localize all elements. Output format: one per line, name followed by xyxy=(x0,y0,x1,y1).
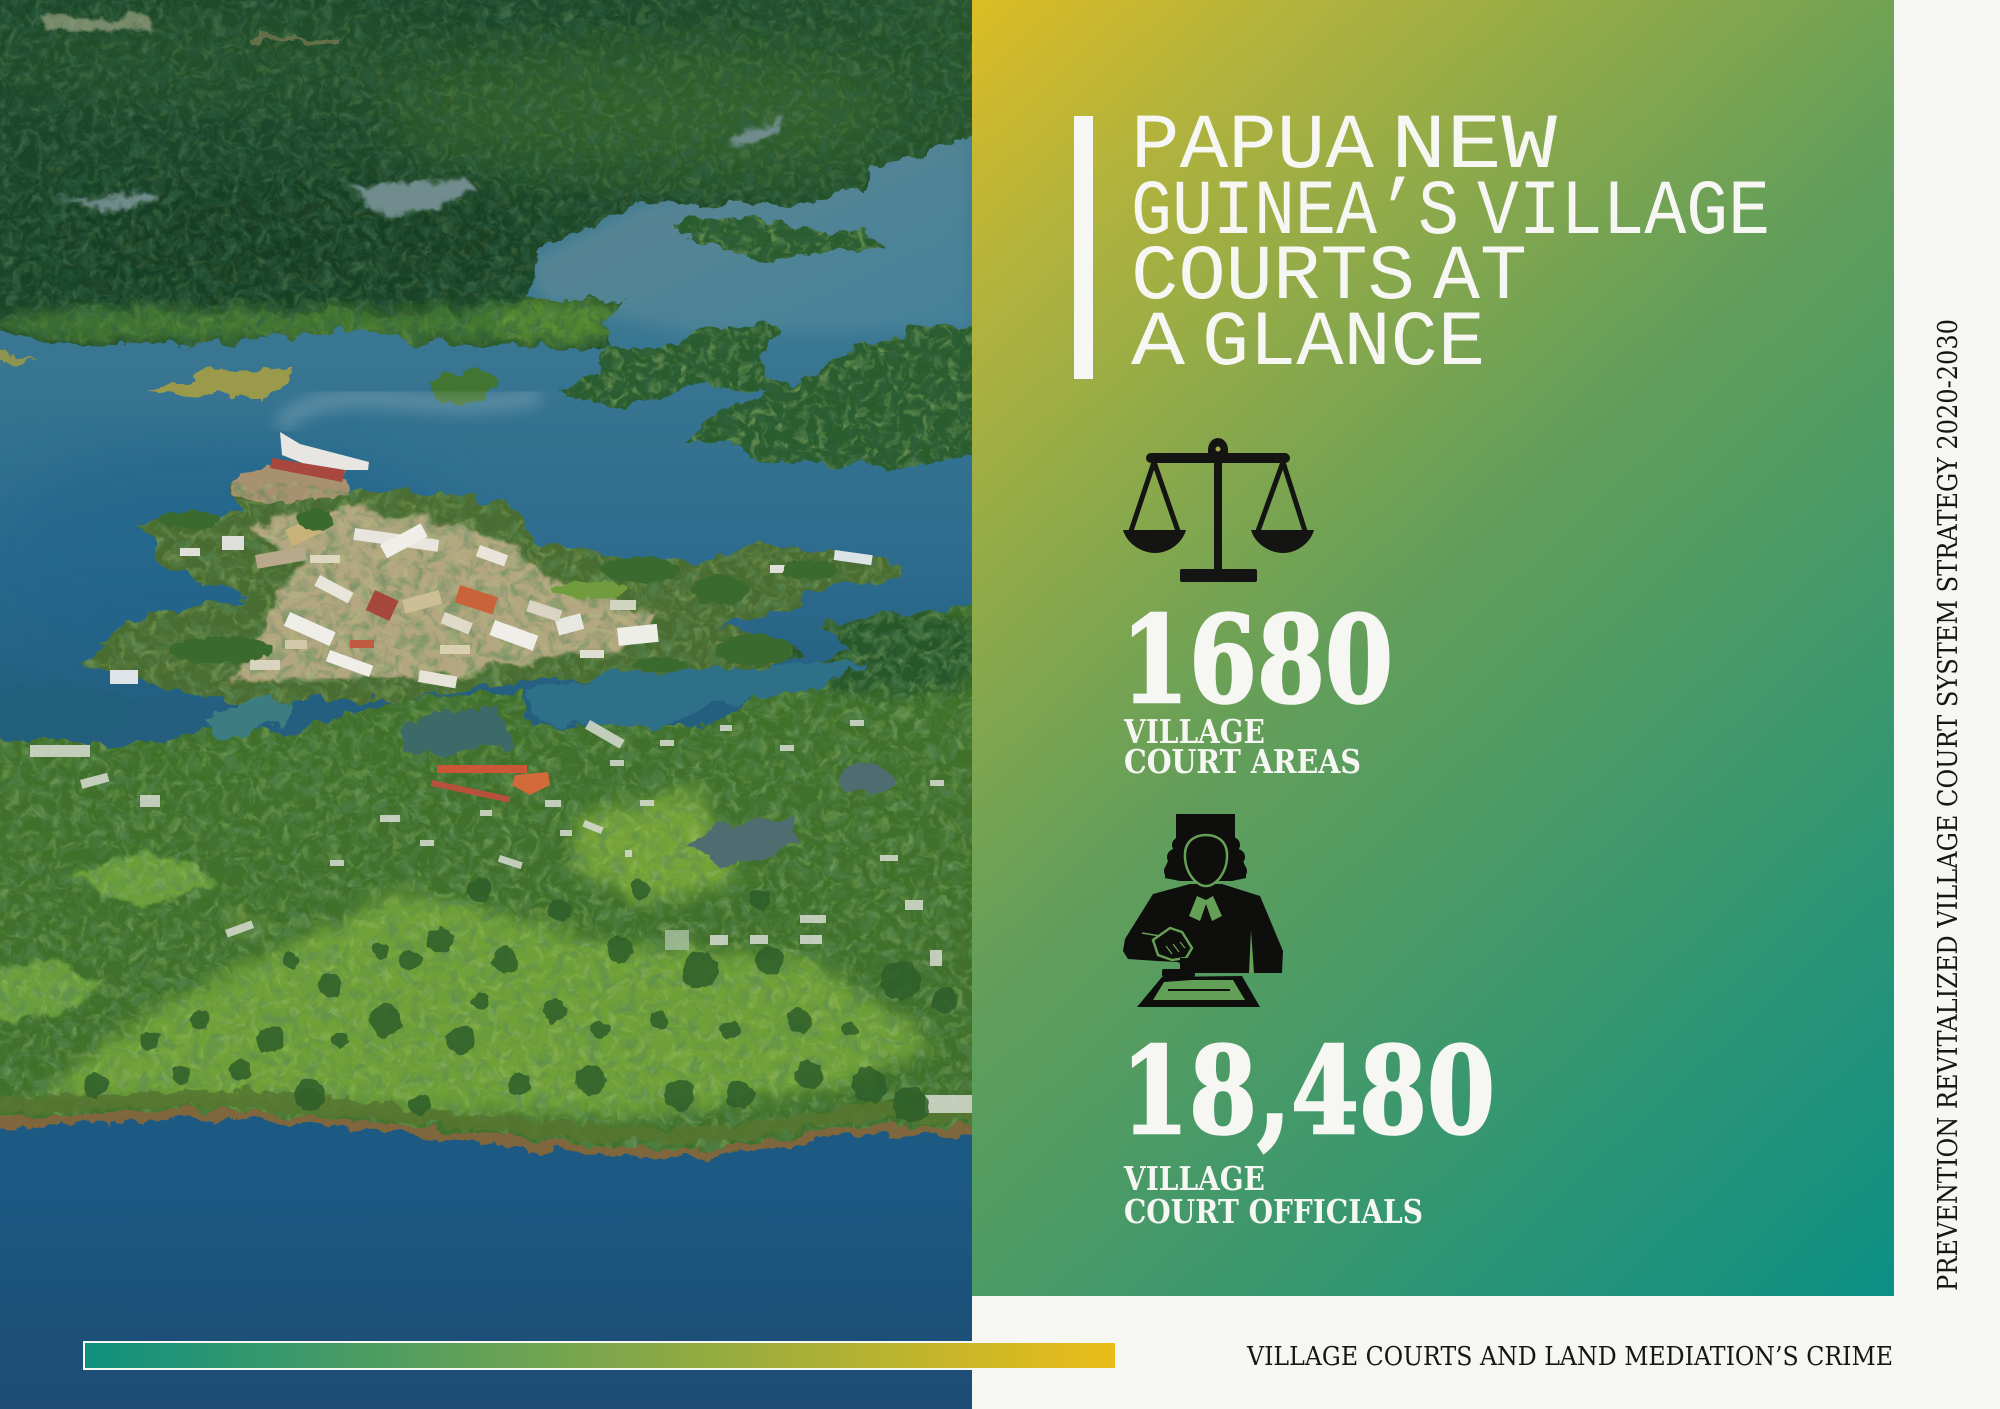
sports fields xyxy=(0,850,290,1020)
stat label: village court officials: COURT OFFICIALS xyxy=(1124,1192,1423,1231)
red roofs xyxy=(431,765,550,803)
coastal vegetation xyxy=(0,1098,1010,1138)
open bay shading xyxy=(10,456,383,594)
ship xyxy=(270,432,369,482)
ponds xyxy=(687,764,894,865)
grassy island xyxy=(150,368,288,397)
clearing track xyxy=(250,38,340,43)
footer text: VILLAGE COURTS AND LAND MEDIATION’S CRIME xyxy=(1246,1342,1893,1372)
golf course field xyxy=(38,891,937,1117)
ship smoke xyxy=(280,395,540,428)
stat label: village court areas xyxy=(1123,712,1361,781)
coastline xyxy=(0,1114,1010,1156)
stat label: village court areas: VILLAGE xyxy=(1123,712,1265,751)
small round island xyxy=(431,370,499,404)
town land xyxy=(87,480,903,700)
land texture xyxy=(0,470,1010,1170)
port xyxy=(232,462,350,505)
forest xyxy=(0,0,1010,350)
field trees xyxy=(83,878,958,1123)
forest lighting xyxy=(0,0,1010,370)
title: AT xyxy=(1433,234,1527,322)
grass around pond xyxy=(575,790,740,906)
title accent bar xyxy=(1074,116,1093,379)
town greenery xyxy=(160,509,838,672)
title: GLANCE xyxy=(1202,300,1485,388)
stat label: village court officials: VILLAGE xyxy=(1123,1159,1265,1198)
island texture xyxy=(566,215,972,470)
stat label: village court areas: COURT AREAS xyxy=(1124,742,1361,781)
title: A xyxy=(1131,300,1185,388)
lakes in forest xyxy=(50,122,784,213)
title: PAPUA xyxy=(1131,103,1374,191)
vertical side text: PREVENTION REVITALIZED VILLAGE COURT SYSTEM STRATEGY 2020-2030 xyxy=(1933,319,1964,1291)
left grassy shore xyxy=(0,349,38,366)
aerial photo of coastal town xyxy=(0,0,1020,1409)
stat number: 1680: 1680 xyxy=(1121,590,1393,731)
forested islands xyxy=(565,216,1010,467)
village clearing xyxy=(42,18,152,30)
gradient panel xyxy=(972,0,1894,1296)
houses xyxy=(30,720,972,1113)
title: COURTS xyxy=(1131,234,1415,322)
upper bay xyxy=(530,130,972,335)
displaced scene xyxy=(0,0,1020,1170)
water channel xyxy=(525,660,867,728)
stat number: 18,480: 18,480 xyxy=(1121,1021,1495,1162)
town paved area xyxy=(231,504,662,683)
title xyxy=(1131,103,1770,388)
water xyxy=(0,0,972,1409)
stat label: village court officials xyxy=(1123,1159,1423,1231)
title: VILLAGE xyxy=(1477,169,1770,257)
icon: balance scales xyxy=(1123,438,1314,582)
footer gradient bar xyxy=(83,1341,1115,1370)
icon: judge with stamp xyxy=(1123,814,1283,1007)
title: GUINEA’S xyxy=(1131,169,1459,257)
town buildings xyxy=(110,515,873,688)
lower land xyxy=(0,598,1010,1159)
title: NEW xyxy=(1391,103,1557,191)
inlets xyxy=(0,690,512,752)
